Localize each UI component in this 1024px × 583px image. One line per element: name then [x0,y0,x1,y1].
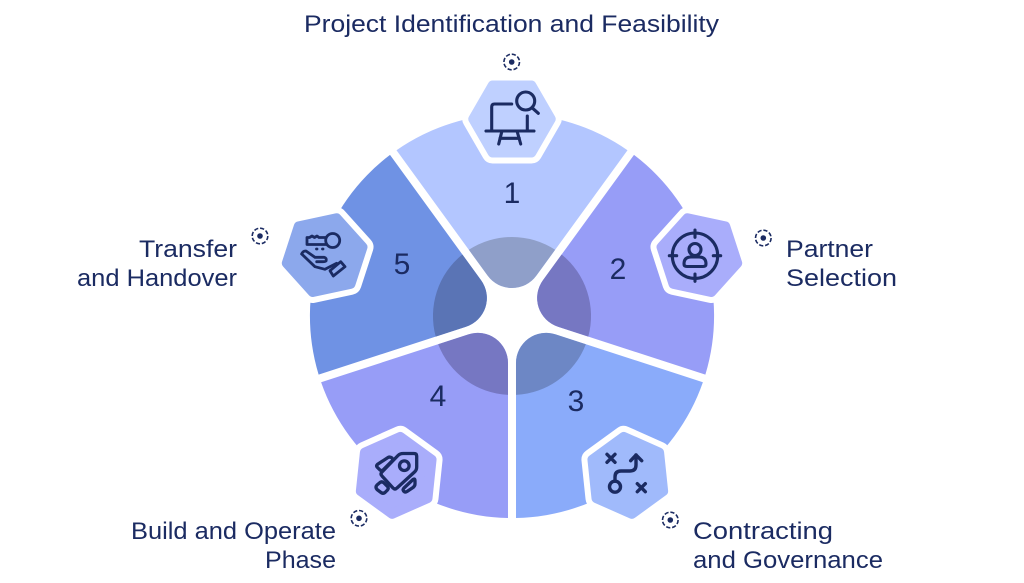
label: Partner Selection: Partner [786,236,873,263]
label: Build and Operate Phase: Build and Operate [131,518,336,545]
number 4: 4 [430,380,446,413]
label: Build and Operate Phase: Phase [265,547,336,574]
label: Transfer and Handover [77,236,237,292]
number 5: 5 [394,248,410,281]
number 2: 2 [610,253,626,286]
panel: segment 5 [284,144,521,417]
label: Partner Selection: Selection [786,265,897,292]
hexagon badge 5 [281,208,368,302]
panel: segment 1 [396,114,628,288]
icon: strategy route [607,454,645,492]
label: Contracting and Governance [693,518,883,574]
heading: Project Identification and Feasibility: Project Identification and Feasibility [304,11,719,38]
hexagon badge 4 [345,426,447,525]
label: Build and Operate Phase [131,518,336,574]
label: Transfer and Handover: Transfer [139,236,237,263]
icon: target marker 1 [504,54,520,70]
panel: segment 2 [503,144,740,417]
icon: target marker 2 [756,230,771,246]
icon: person in target [669,230,721,281]
panel: segment 4 [300,271,589,547]
hexagon badge 3 [577,426,679,525]
icon: rocket [376,454,417,493]
label: Contracting and Governance: Contracting [693,518,833,545]
label: Contracting and Governance: and Governance [693,547,883,574]
label: Transfer and Handover: and Handover [77,265,237,292]
hexagon badge 2 [656,208,743,302]
number 3: 3 [568,385,584,418]
icon: target marker 5 [252,228,268,244]
icon: target marker 3 [662,512,678,528]
hexagon badge 1 [473,86,551,152]
number 1: 1 [504,177,520,210]
icon: key over hand [302,234,345,276]
icon: monitor with magnifier [486,92,538,144]
icon: target marker 4 [351,510,367,526]
panel: segment 3 [435,271,724,547]
label: Partner Selection [786,236,897,292]
